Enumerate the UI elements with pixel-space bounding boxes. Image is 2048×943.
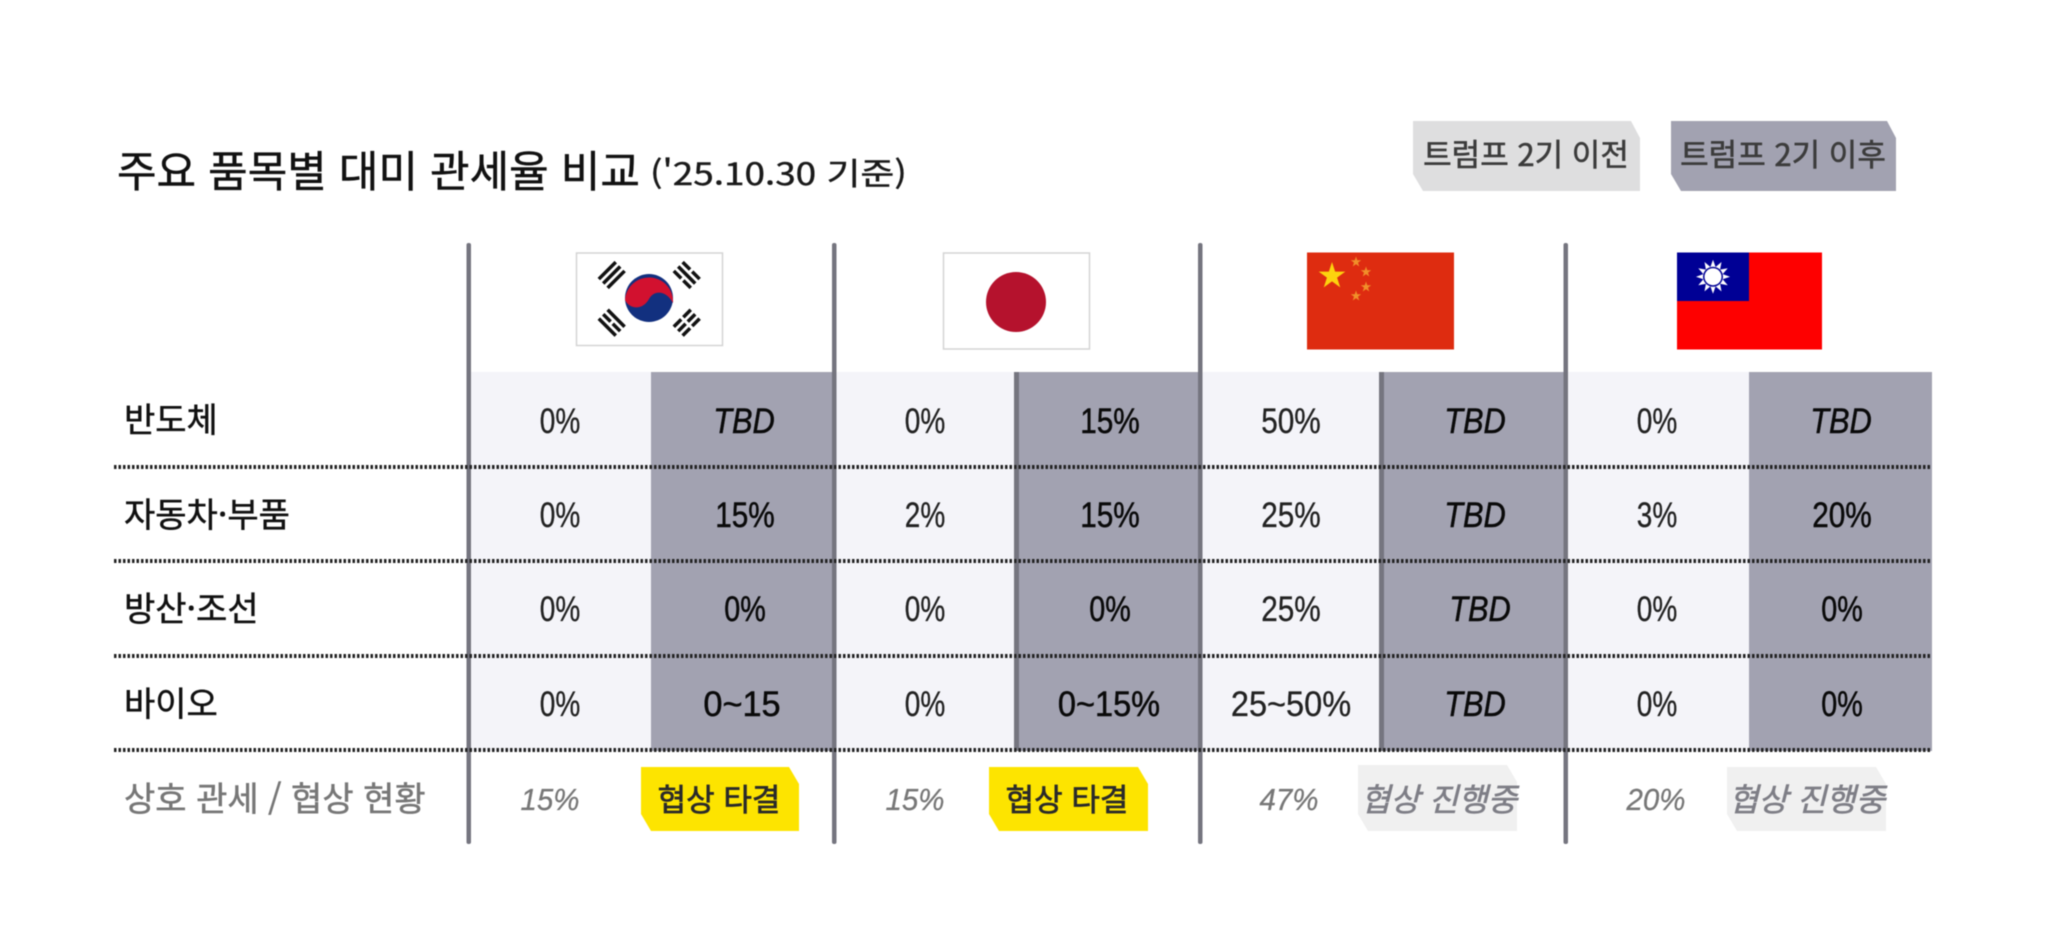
row: bio: 0%	[905, 684, 945, 724]
row: semiconductors: 15%	[1080, 402, 1140, 441]
title	[117, 138, 907, 200]
row: defense and shipbuilding: 25%	[1261, 590, 1321, 629]
legend	[1413, 121, 1896, 191]
row: defense and shipbuilding: 0%	[905, 589, 945, 629]
row: bio: TBD	[1444, 684, 1506, 723]
title: 주요 품목별 대미 관세율 비교	[117, 138, 640, 200]
row: defense and shipbuilding: 방산·조선	[124, 582, 259, 631]
badge: deal concluded, Korea	[641, 767, 799, 831]
row: autos and parts: 15%	[1080, 496, 1140, 535]
row: semiconductors: 0%	[1637, 401, 1677, 441]
icon: Japan flag	[944, 253, 1090, 349]
badge: in negotiation, Taiwan	[1727, 767, 1888, 831]
badge: deal concluded, Japan	[989, 767, 1148, 831]
row: semiconductors: 0%	[905, 401, 945, 441]
column dividers	[466, 243, 1568, 844]
row: autos and parts: 25%	[1261, 496, 1321, 535]
row: bio: 0~15%	[1058, 685, 1160, 724]
legend: before Trump 2nd term	[1413, 121, 1640, 191]
row: defense and shipbuilding: TBD	[1449, 589, 1511, 628]
badge: in negotiation, China	[1358, 765, 1520, 831]
row: autos and parts: 3%	[1637, 495, 1677, 535]
row: semiconductors: TBD	[1810, 401, 1872, 440]
row: autos and parts	[124, 488, 1872, 537]
row: defense and shipbuilding: 0%	[1821, 589, 1863, 629]
icon: Taiwan flag	[1677, 252, 1822, 350]
legend: before Trump 2nd term: 트럼프 2기 이전	[1423, 130, 1629, 175]
row: defense and shipbuilding: 0%	[540, 589, 580, 629]
row: semiconductors: 반도체	[124, 393, 218, 442]
row: bio: 0%	[1637, 684, 1677, 724]
row: bio: 0%	[540, 684, 580, 724]
row: semiconductors: TBD	[1444, 401, 1506, 440]
badge: in negotiation, Taiwan: 협상 진행중	[1729, 775, 1888, 821]
row: autos and parts: 2%	[905, 495, 945, 535]
row: autos and parts: TBD	[1444, 495, 1506, 534]
row: reciprocal tariff and negotiation status: 47%	[1260, 783, 1318, 817]
row: defense and shipbuilding	[124, 582, 1863, 631]
badge: in negotiation, China: 협상 진행중	[1361, 775, 1520, 821]
row: defense and shipbuilding: 0%	[724, 589, 766, 629]
row: semiconductors: 0%	[540, 401, 580, 441]
row: defense and shipbuilding: 0%	[1637, 589, 1677, 629]
row: autos and parts: 자동차·부품	[124, 488, 290, 537]
row: reciprocal tariff and negotiation status	[124, 765, 1888, 831]
legend: after Trump 2nd term	[1671, 121, 1896, 191]
row: defense and shipbuilding: 0%	[1089, 589, 1131, 629]
row: bio: 바이오	[124, 677, 218, 726]
title: ('25.10.30 기준)	[650, 149, 907, 194]
row: bio: 25~50%	[1231, 685, 1351, 724]
icon: China flag	[1307, 252, 1454, 350]
row: autos and parts: 20%	[1812, 496, 1872, 535]
table background cells	[469, 372, 1932, 751]
row: bio: 0~15	[703, 686, 781, 724]
row: autos and parts: 0%	[540, 495, 580, 535]
legend: after Trump 2nd term: 트럼프 2기 이후	[1680, 130, 1886, 175]
row: reciprocal tariff and negotiation status: 15%	[886, 783, 944, 817]
row: bio: 0%	[1821, 684, 1863, 724]
row dotted lines	[114, 467, 1931, 750]
row: reciprocal tariff and negotiation status: 상호 관세 / 협상 현황	[124, 772, 426, 821]
row: semiconductors: TBD	[713, 401, 775, 440]
badge: deal concluded, Korea: 협상 타결	[658, 775, 780, 820]
row: autos and parts: 15%	[715, 496, 775, 535]
badge: deal concluded, Japan: 협상 타결	[1006, 775, 1128, 820]
row: reciprocal tariff and negotiation status: 15%	[521, 783, 579, 817]
row: reciprocal tariff and negotiation status: 20%	[1626, 783, 1685, 817]
row: semiconductors: 50%	[1261, 402, 1321, 441]
icon: South Korea flag	[576, 253, 722, 346]
row: semiconductors	[124, 393, 1872, 442]
row: bio	[124, 677, 1863, 726]
